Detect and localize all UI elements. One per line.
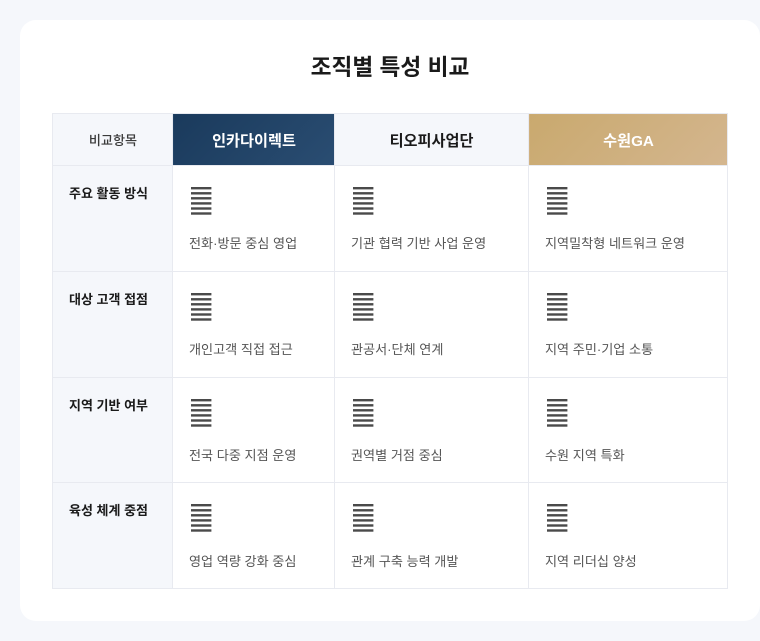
row label: 육성 체계 중점: 육성 체계 중점 <box>69 503 148 518</box>
cell: 수원GA region: 수원 지역 특화 <box>545 448 625 463</box>
row label: 지역 기반 여부: 지역 기반 여부 <box>69 398 148 413</box>
cell: 수원GA training: 지역 리더십 양성 <box>545 554 637 569</box>
cell: 인카다이렉트 region <box>172 378 334 482</box>
header: comparison item <box>52 114 172 166</box>
cell: 수원GA customers: 지역 주민·기업 소통 <box>545 342 653 357</box>
cell: 인카다이렉트 activity: 전화·방문 중심 영업 <box>189 236 297 251</box>
cell: 인카다이렉트 training <box>172 482 334 588</box>
comparison table <box>52 113 728 589</box>
cell: 수원GA activity: 지역밀착형 네트워크 운영 <box>545 236 685 251</box>
cell: 인카다이렉트 customers: 개인고객 직접 접근 <box>189 342 293 357</box>
title: 조직별 특성 비교 <box>311 54 469 80</box>
header: comparison item: 비교항목 <box>89 133 137 148</box>
header: 수원GA: 수원GA <box>603 132 654 150</box>
cell: 인카다이렉트 customers <box>172 272 334 378</box>
cell: 티오피사업단 region <box>334 378 528 482</box>
row label: 육성 체계 중점 <box>52 482 172 588</box>
cell: 수원GA training <box>528 482 728 588</box>
header: 티오피사업단: 티오피사업단 <box>390 132 473 150</box>
cell: 인카다이렉트 activity <box>172 166 334 272</box>
header: 인카다이렉트 <box>172 114 334 166</box>
cell: 수원GA activity <box>528 166 728 272</box>
cell: 티오피사업단 customers <box>334 272 528 378</box>
cell: 티오피사업단 training <box>334 482 528 588</box>
cell: 티오피사업단 region: 권역별 거점 중심 <box>351 448 443 463</box>
row label: 주요 활동 방식 <box>52 166 172 272</box>
cell: 티오피사업단 customers: 관공서·단체 연계 <box>351 342 443 357</box>
cell: 티오피사업단 activity <box>334 166 528 272</box>
header: 수원GA <box>528 114 728 166</box>
cell: 수원GA region <box>528 378 728 482</box>
cell: 티오피사업단 activity: 기관 협력 기반 사업 운영 <box>351 236 486 251</box>
row label: 대상 고객 접점 <box>52 272 172 378</box>
cell: 수원GA customers <box>528 272 728 378</box>
cell: 인카다이렉트 training: 영업 역량 강화 중심 <box>189 554 296 569</box>
cell: 티오피사업단 training: 관계 구축 능력 개발 <box>351 554 458 569</box>
cell: 인카다이렉트 region: 전국 다중 지점 운영 <box>189 448 296 463</box>
row label: 대상 고객 접점: 대상 고객 접점 <box>69 292 148 307</box>
header: 인카다이렉트: 인카다이렉트 <box>212 132 296 150</box>
row label: 지역 기반 여부 <box>52 378 172 482</box>
header: 티오피사업단 <box>334 114 528 166</box>
row label: 주요 활동 방식: 주요 활동 방식 <box>69 186 148 201</box>
